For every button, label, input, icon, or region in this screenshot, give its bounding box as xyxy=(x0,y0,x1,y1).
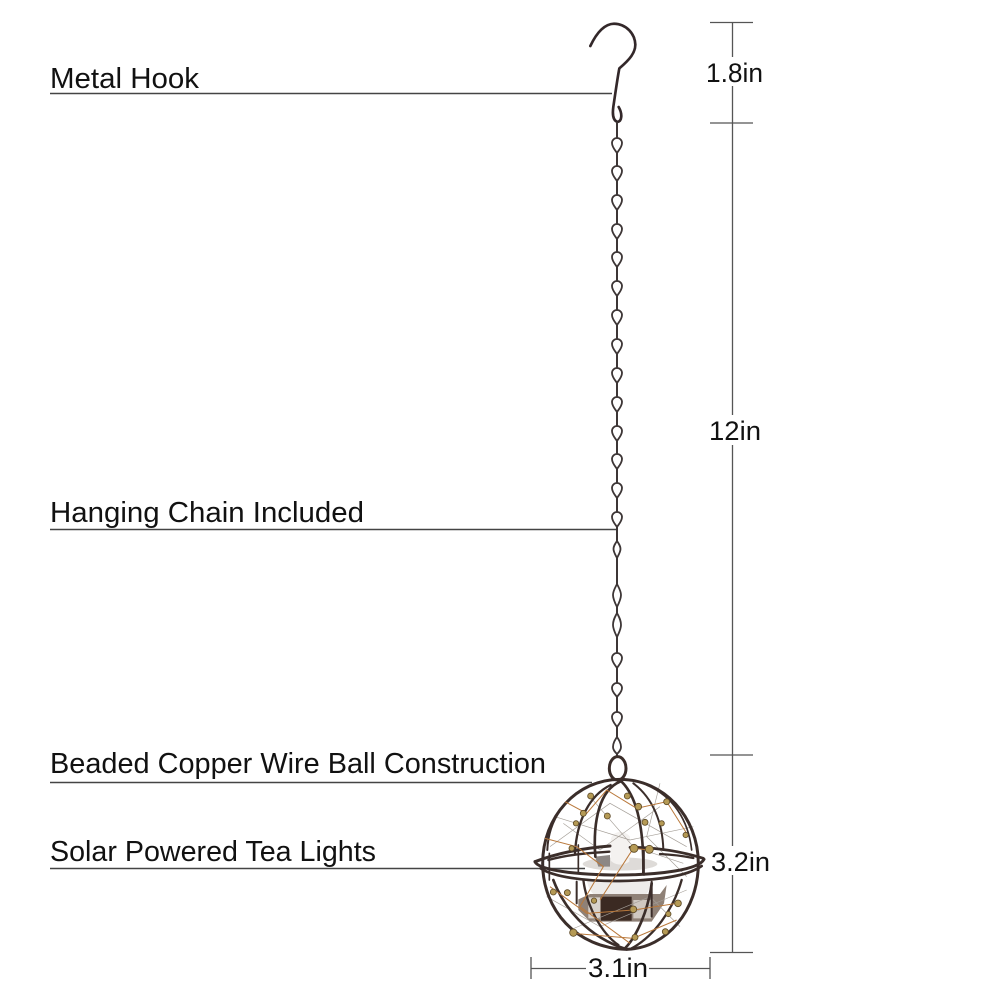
dimension: vertical height line with ticks xyxy=(710,22,753,952)
dimension text: 1.8in: 1.8in xyxy=(706,58,763,88)
icon: beaded wire ball with solar tea light xyxy=(520,740,704,949)
icon: metal hook xyxy=(590,24,635,122)
dimension text: 3.2in: 3.2in xyxy=(711,847,770,877)
dimension text: 12in: 12in xyxy=(709,416,761,446)
thin grey wires xyxy=(547,783,693,930)
label: Hanging Chain Included: Hanging Chain Included xyxy=(50,497,364,529)
frame xyxy=(520,740,704,949)
copper wires xyxy=(545,790,687,943)
label: Metal Hook: Metal Hook xyxy=(50,63,200,95)
label: Beaded Copper Wire Ball Construction: Beaded Copper Wire Ball Construction xyxy=(50,748,546,780)
beads xyxy=(550,793,688,940)
solar panel xyxy=(578,885,667,922)
chain xyxy=(612,122,622,756)
tea light cup and candle xyxy=(583,832,657,895)
label: Solar Powered Tea Lights: Solar Powered Tea Lights xyxy=(50,836,376,868)
dimension: width 3.1in: 3.1in xyxy=(588,953,648,983)
